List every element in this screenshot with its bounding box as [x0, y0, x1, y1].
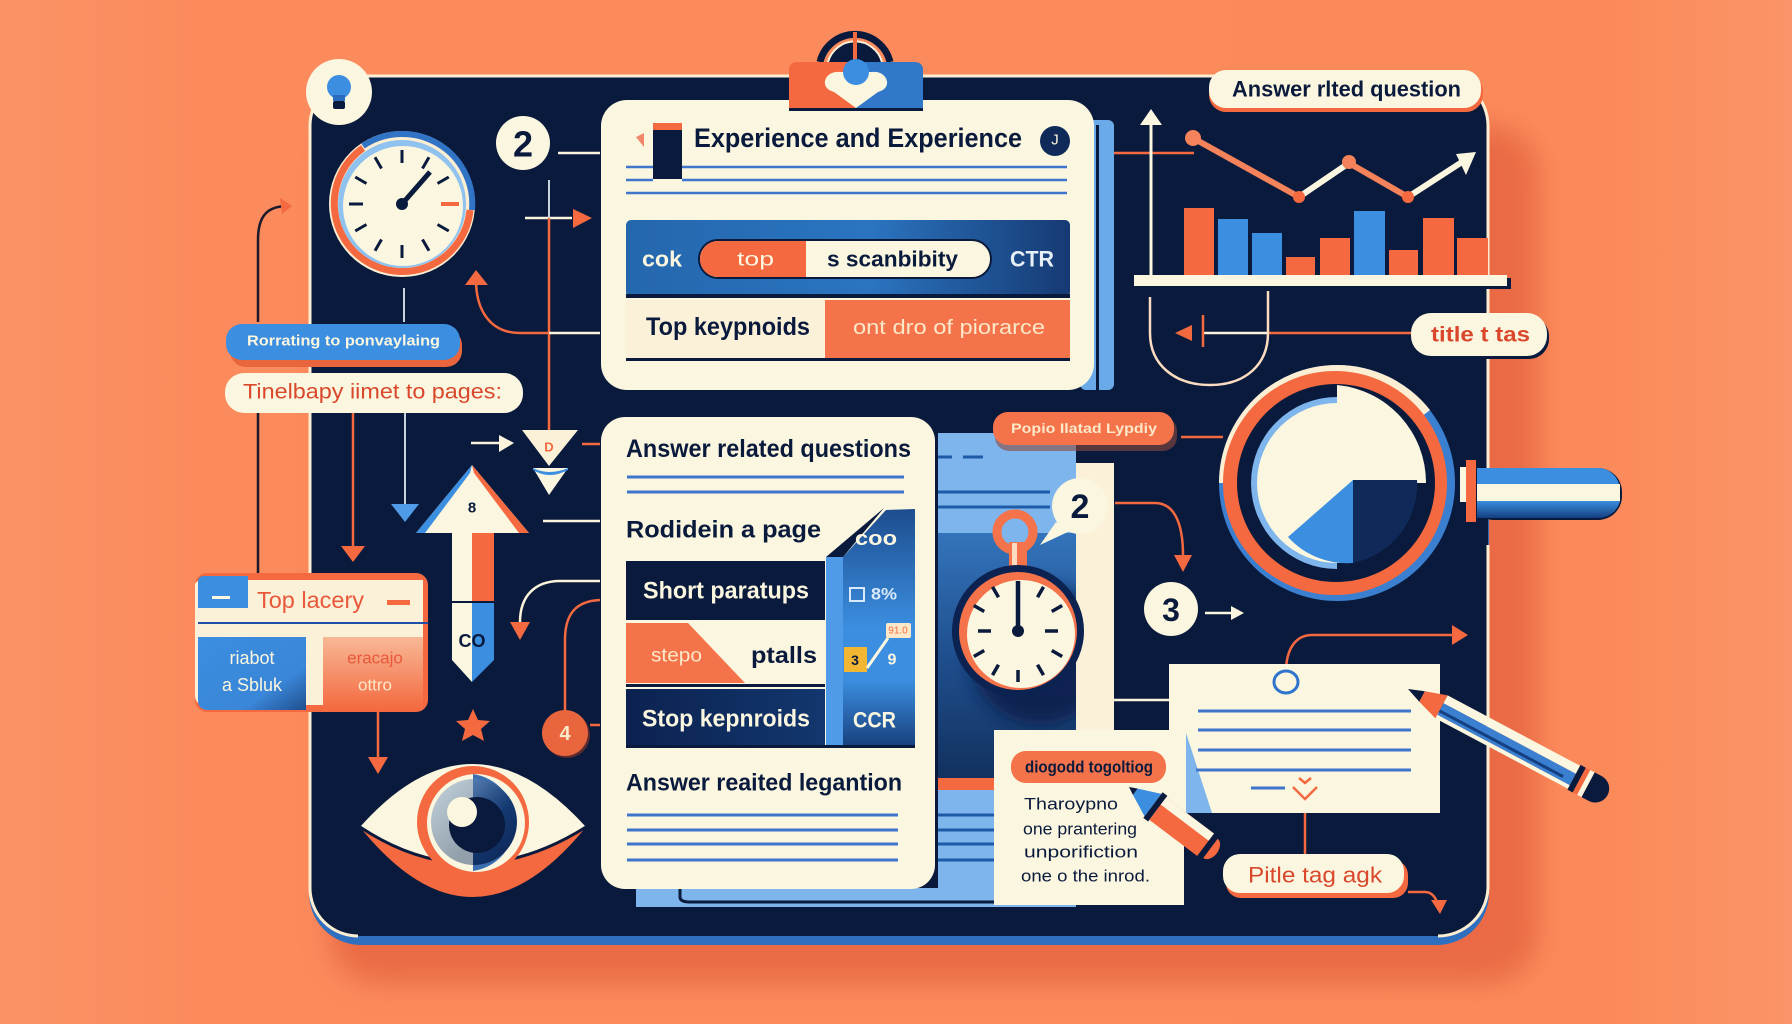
baseline shelf: [1134, 275, 1511, 289]
table: [626, 508, 915, 748]
score column: 9: [888, 652, 897, 668]
bars: [1184, 208, 1488, 275]
icon: bookmark: [636, 123, 682, 179]
score column: [626, 508, 915, 748]
orange cell: eracajo: [347, 648, 403, 668]
toggle pill: s scanbibity: [827, 246, 959, 272]
table: Short paratups: [643, 578, 809, 604]
pencil small: [1119, 774, 1226, 866]
orange cell: ottro: [358, 676, 392, 694]
handle: [1460, 460, 1622, 522]
score column: CCR: [853, 708, 896, 732]
number badge 4: [542, 710, 590, 758]
trend line: [1185, 130, 1476, 203]
blue row with pill: CTR: [1010, 246, 1054, 272]
score column: 3: [851, 652, 859, 668]
keyword row: [626, 300, 1070, 361]
pill: cream label: Tinelbapy iimet to pages:: [243, 380, 502, 404]
top lacery box: [195, 573, 428, 712]
body text: one o the inrod.: [1021, 866, 1150, 886]
icon: lightbulb badge: [306, 59, 372, 125]
pill: title tag ask: Pitle tag agk: [1248, 862, 1383, 888]
y axis: [1140, 109, 1162, 278]
note ring: [1274, 671, 1298, 693]
magnifying glass: [1219, 365, 1622, 601]
body text: one prantering: [1023, 820, 1137, 838]
badge J: J: [1051, 132, 1059, 148]
chevrons: [1293, 778, 1317, 799]
clock gauge: [329, 131, 475, 277]
pill: title tag ask: [1223, 854, 1408, 898]
pencil large: [1401, 677, 1614, 807]
subheading: Answer reaited legantion: [626, 770, 902, 796]
speech bubble number: [1040, 478, 1108, 545]
stopwatch: [952, 510, 1084, 730]
up arrow: 8: [468, 500, 476, 516]
pill: cream label: [225, 373, 523, 413]
body text: Tharoypno: [1024, 794, 1118, 814]
text lines: [626, 167, 1067, 193]
clock ticks: [349, 150, 449, 258]
blue row with pill: [626, 220, 1070, 298]
up arrow: [416, 465, 529, 682]
table: ptalls: [751, 642, 817, 668]
score column: 8%: [871, 584, 897, 604]
table: stepo: [651, 646, 702, 666]
score column: 91.0: [888, 626, 908, 636]
label pill: [1011, 751, 1166, 783]
connector lines and arrows: [258, 153, 1468, 914]
number badge 2: 2: [513, 124, 533, 164]
icon: eye: [360, 764, 586, 897]
note card with lines: [1169, 664, 1440, 813]
arrow from badge 3: [1205, 606, 1244, 620]
number badge 3: [1144, 582, 1198, 636]
speech bubble number: 2: [1071, 488, 1089, 526]
star: [456, 709, 490, 741]
table: Stop kepnroids: [642, 706, 810, 732]
tab: [198, 576, 248, 608]
icon: top tab with heart: [789, 32, 923, 111]
score column: coo: [855, 528, 897, 550]
panel shadow: [330, 125, 1538, 983]
stopwatch crown: [997, 514, 1033, 566]
panel: experience card: [601, 100, 1094, 390]
body text: [1021, 794, 1150, 886]
panel: related questions card: [601, 417, 935, 889]
keyword row: ont dro of piorarce: [853, 317, 1045, 339]
label pill: diogodd togoltiog: [1025, 758, 1153, 776]
pie wedge: [1288, 480, 1417, 563]
main dark panel: [309, 76, 1489, 945]
bar and line chart: [1134, 109, 1511, 289]
pill: popio label: [993, 412, 1177, 451]
badge J: [1040, 126, 1070, 156]
number badge 2: [496, 116, 550, 170]
number badge 4: 4: [559, 723, 571, 745]
keyword row: Top keypnoids: [646, 313, 810, 341]
up arrow: CO: [458, 631, 486, 651]
stacked pages behind card: [1080, 120, 1114, 390]
pill: title tag: title t tas: [1431, 324, 1530, 346]
pill: answer question: Answer rlted question: [1232, 76, 1461, 102]
pill: title tag: [1411, 313, 1549, 359]
page behind second card: [636, 433, 1114, 907]
triangle markers: [522, 430, 578, 495]
card heading: Answer related questions: [626, 435, 911, 463]
pill: blue label: Rorrating to ponvaylaing: [247, 332, 440, 350]
arrow from bubble to badge: [1115, 503, 1192, 572]
note: body text card: [994, 730, 1184, 905]
number badge 3: 3: [1162, 592, 1180, 628]
toggle pill: [699, 240, 991, 278]
orange cell: [323, 637, 423, 710]
subheading: Rodidein a page: [626, 516, 821, 544]
toggle pill: top: [737, 250, 774, 270]
blue row with pill: cok: [642, 246, 683, 272]
stopwatch ticks: [974, 587, 1062, 682]
blue cell: riabot: [229, 648, 275, 668]
card heading: Experience and Experience: [694, 123, 1022, 153]
blue cell: [198, 637, 306, 710]
pill: blue label: [226, 324, 462, 367]
body text: unporifiction: [1024, 842, 1138, 862]
pill: answer question: [1209, 70, 1483, 112]
triangle markers: D: [544, 440, 554, 454]
top lacery box: Top lacery: [257, 587, 365, 613]
pill: popio label: Popio Ilatad Lypdiy: [1011, 420, 1157, 436]
blue cell: a Sbluk: [222, 675, 283, 695]
